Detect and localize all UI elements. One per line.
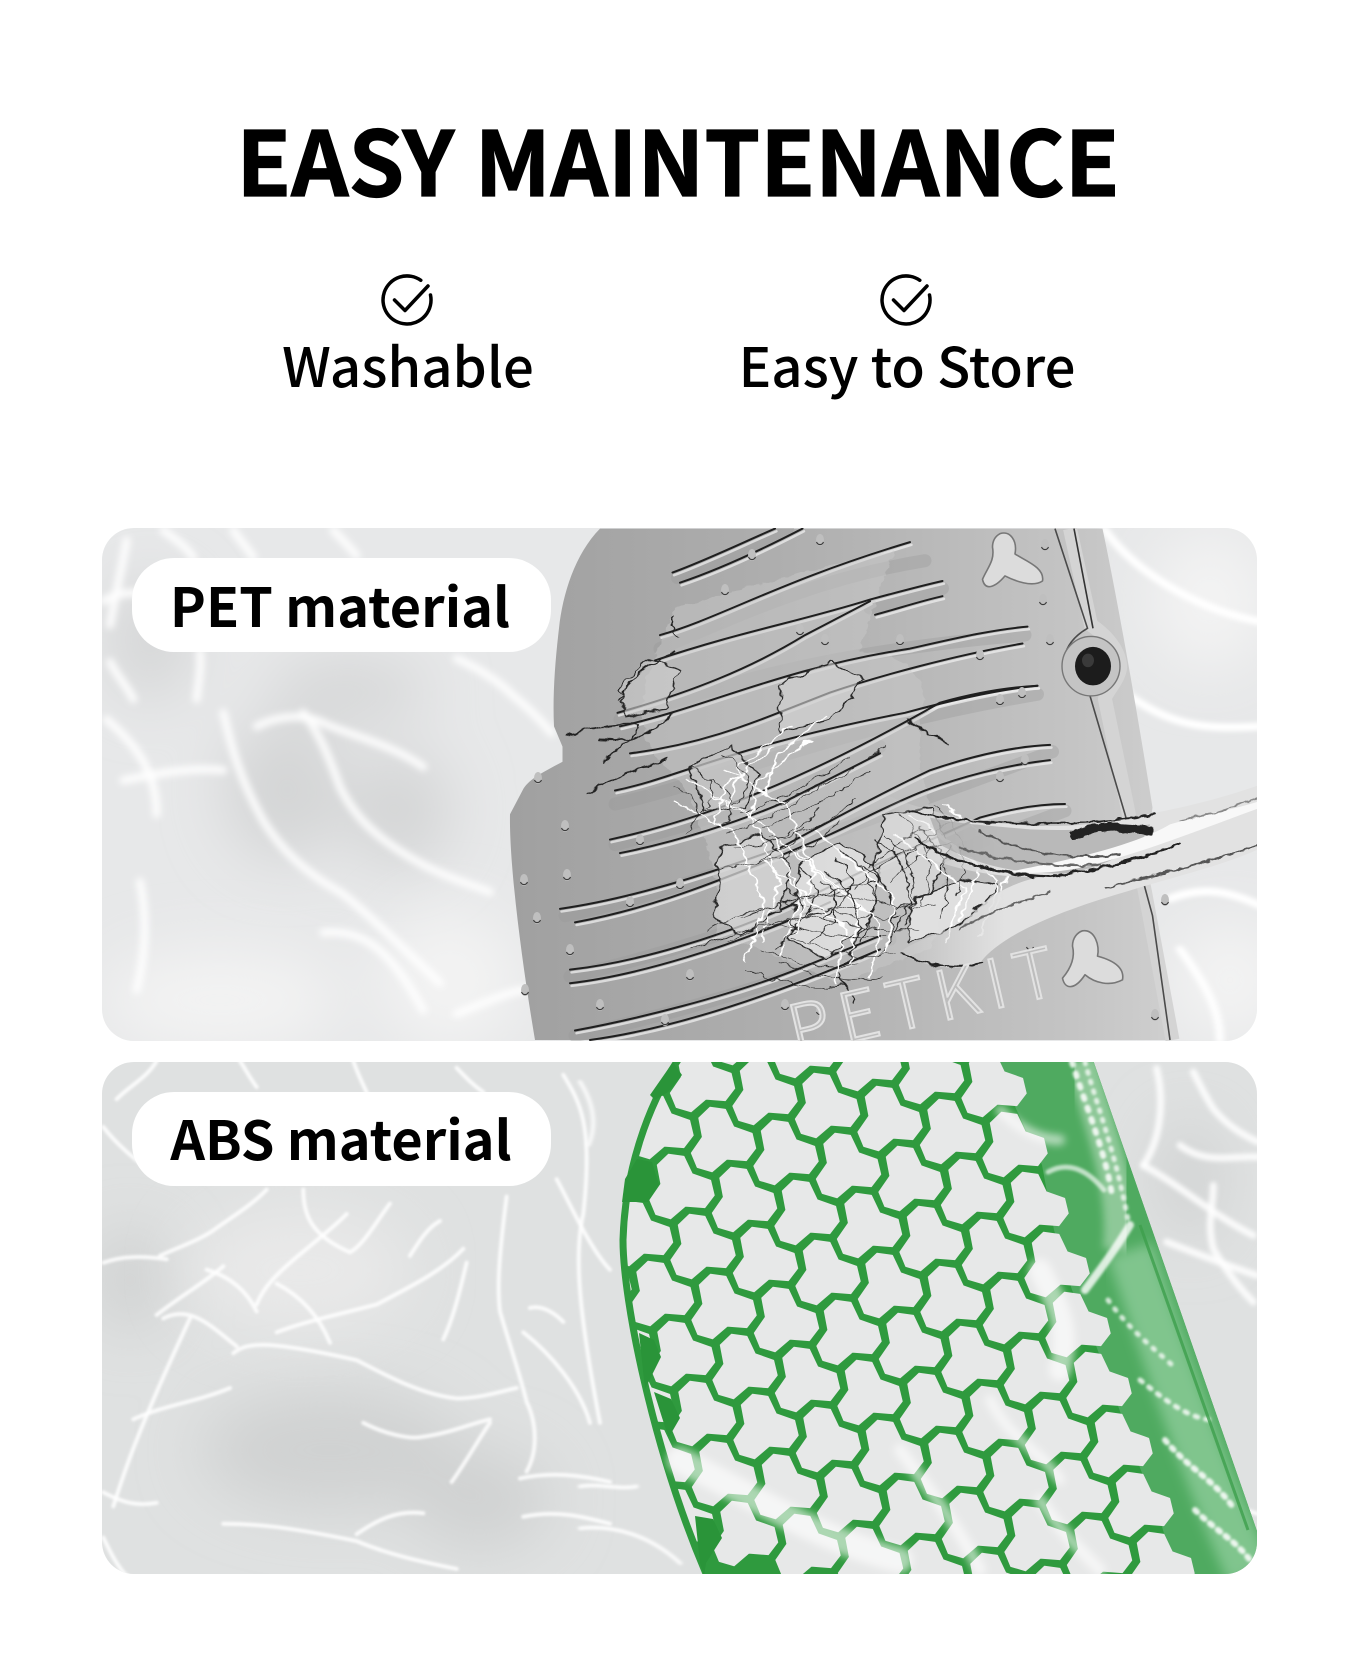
scoop hole backdrop xyxy=(620,1060,1258,1576)
button boss xyxy=(1062,636,1120,696)
trefoil vents xyxy=(982,533,1123,987)
scoop ridge xyxy=(1140,1225,1248,1530)
left rim xyxy=(623,1060,707,1576)
icon: check washable xyxy=(383,276,431,324)
label: Washable: Washable xyxy=(282,324,534,403)
fog over lattice xyxy=(680,1110,1100,1570)
water background xyxy=(100,528,1290,1050)
groove dark lines xyxy=(560,529,1065,1040)
label pill: ABS material: ABS material xyxy=(169,1097,512,1176)
groove bands xyxy=(565,529,1065,1036)
mat body xyxy=(510,529,1172,1040)
embossed PETKIT lettering: PETKIT xyxy=(777,915,1073,1074)
label pill: PET material xyxy=(132,558,551,652)
label pill: ABS material xyxy=(132,1092,551,1186)
splash patches xyxy=(620,659,1000,960)
panel: PET material xyxy=(100,528,1290,1074)
light water sheet xyxy=(642,551,943,983)
scoop solid right band xyxy=(990,1060,1258,1580)
right edge strip xyxy=(1055,529,1172,1040)
product: PET litter mat xyxy=(510,529,1261,1043)
splash detail xyxy=(565,618,1015,1003)
water streaks over scoop xyxy=(680,1060,1250,1575)
label pill: PET material: PET material xyxy=(170,564,510,643)
scoop body xyxy=(620,1060,1258,1580)
panel: ABS material xyxy=(90,1060,1260,1580)
groove highlights xyxy=(562,531,1066,1043)
scoop: ABS perforated scoop xyxy=(620,1060,1258,1580)
icon: check easy to store xyxy=(882,276,930,324)
water stream xyxy=(878,784,1261,968)
water background xyxy=(90,1061,1260,1576)
left rim solid patches xyxy=(622,1062,722,1576)
droplets xyxy=(520,534,1169,1026)
label: Easy to Store: Easy to Store xyxy=(739,324,1075,403)
title: EASY MAINTENANCE xyxy=(236,92,1120,222)
